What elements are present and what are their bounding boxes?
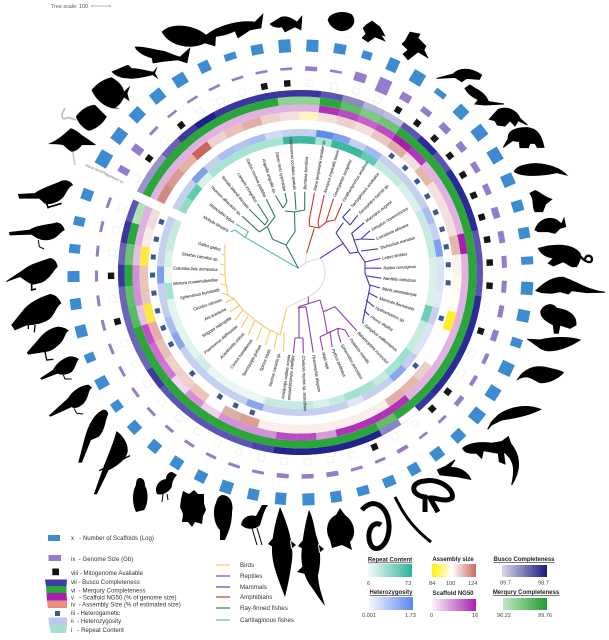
iv: assembly key: iv - Assembly Size (% of estimated size) (71, 602, 181, 608)
species labels: Trichechus manatus (379, 235, 416, 251)
species labels: Sphenodon punctatus (340, 343, 364, 380)
species labels: Seriola lalandi dorsalis (221, 175, 250, 210)
icon: armadillo (489, 108, 527, 126)
root connections (287, 253, 325, 308)
icon: lyrebird fan (180, 490, 206, 527)
icon: rat (535, 218, 566, 233)
species labels: Marmota flaviventris (379, 296, 415, 312)
icon: wading bird (156, 472, 177, 502)
icon: capybara (541, 305, 576, 333)
icon: clouded leopard (538, 245, 592, 267)
v: scaffold key: v - Scaffold NG50 (% of genome size) (71, 594, 177, 602)
species labels: Geotrypetes seraphini (332, 159, 353, 198)
color scale: busco completeness: 98.7 (538, 580, 549, 586)
legend: clades: Birds (240, 562, 254, 569)
mammal and reptile silhouettes, right side (437, 69, 605, 485)
icon: thin snake (395, 497, 431, 542)
color scale: repeat content (367, 558, 412, 587)
icon: lizard (463, 437, 519, 485)
species labels: Bombina bombina (302, 156, 309, 190)
color scale: repeat content: 6 (367, 581, 370, 587)
icon: parrot (79, 410, 108, 462)
species labels: Amblyraja radiata ornata (280, 354, 291, 400)
mammals clade (320, 209, 381, 324)
x: scaffolds key: x - Number of Scaffolds (Log) (71, 535, 154, 542)
ring i: repeat content (164, 136, 437, 409)
species labels: Python bivittatus (331, 348, 347, 377)
icon: elephant (503, 128, 544, 148)
ring iv: assembly size (139, 111, 462, 434)
species labels: Lampris incognitus (236, 172, 259, 203)
viii: mitogenome key: viii - Mitogenome Available (71, 570, 144, 577)
species labels: Acanthisitta chloris (218, 331, 246, 361)
ring x: number of scaffolds (67, 39, 533, 506)
ring iii: heterogametic markers (150, 152, 451, 416)
species labels: Podarcis muralis (349, 337, 371, 364)
species labels: Serinus canaria sp. (267, 352, 281, 387)
species labels: Tachyglossus aculeatus (350, 171, 380, 209)
color scale: heterozygosity: 0.001 (362, 613, 376, 619)
species labels: Corvus hawaiiensis (229, 338, 254, 370)
birds clade (220, 245, 287, 352)
color scale: merqury completeness (493, 590, 560, 619)
amphibians clade (307, 193, 342, 253)
color scale: assembly size: 124 (468, 581, 477, 587)
color scale: merqury completeness: 99.76 (538, 613, 552, 619)
icon: pangolin (536, 277, 605, 294)
color scale: assembly size: Assembly size (432, 557, 474, 563)
color scale: scaffold NG50: Scaffold NG50 (432, 591, 474, 597)
color scale: repeat content: Repeat Content (368, 558, 412, 564)
icon: looped snake (362, 504, 389, 549)
vi: mercury key: vi - Merqury Completeness (71, 588, 146, 594)
legend: clades: Ray-finned fishes (240, 605, 288, 612)
icon: bird 7 (49, 385, 92, 416)
icon: seal (518, 367, 563, 383)
icon: moonfish (92, 77, 130, 108)
species labels: Rana temporaria ranidae sp. (312, 139, 326, 191)
icon: deep-bodied fish (162, 26, 216, 46)
icon: rodent (437, 69, 482, 82)
species labels: Macropus eugenii (364, 199, 393, 223)
species labels: Psarisomus dalhousiae (203, 323, 239, 355)
legend: rings (45, 535, 181, 634)
species labels: Taeniopygia guttata (241, 343, 263, 377)
icon: tuatara (437, 460, 471, 479)
vii: busco key: vii - Busco Completeness (71, 579, 140, 586)
icon: dolphin-shaped seal (527, 337, 580, 351)
cartilaginous fishes clade (230, 224, 298, 268)
icon: hare (530, 191, 552, 212)
species labels: Ara ararauna (202, 306, 228, 322)
icon: bird 2 (9, 223, 64, 249)
iii: heterogametic key: iii - Heterogametic (71, 610, 120, 617)
phylogenetic tree (220, 192, 381, 354)
ring vii: Busco completeness (118, 90, 482, 455)
species labels: Hydrochoerus sp. (375, 305, 406, 323)
color scale: busco completeness: 89.7 (500, 580, 511, 586)
species labels: Phoca vitulina (370, 314, 394, 332)
species labels: Sarcophilus harrisii sp. (357, 183, 390, 216)
tiny outer labels (85, 163, 125, 185)
species labels: Rattus norvegicus (383, 264, 416, 271)
icon: shark (205, 14, 263, 38)
color scale: assembly size (429, 557, 477, 587)
color scale: assembly size: 84 (429, 581, 435, 587)
species labels: Ornithorhynchus anatinus (341, 160, 369, 203)
icon: bird 6 (41, 357, 78, 379)
species labels: Rhincodon typus (208, 202, 236, 224)
ii: heterozygosity key: ii - Heterozygosity (71, 618, 122, 625)
species labels: Dasypus novemcinctus (370, 206, 409, 232)
tree scale: Tree scale: 100 (51, 4, 88, 10)
i: repeat key: i - Repeat Content (71, 627, 124, 634)
icon: whale (488, 407, 541, 429)
reptile and bird silhouettes, bottom (133, 472, 452, 606)
species labels: Strigops habroptila (201, 315, 233, 338)
ring ix: genome size (95, 66, 507, 479)
species labels: Alligator mississippiensis (287, 354, 296, 401)
species labels: Thunnus albacares sp. (209, 184, 243, 217)
species labels: Gallus gallus (198, 241, 221, 252)
species labels: Columba livia domestica (173, 265, 218, 272)
fish and frog silhouettes, top (48, 12, 428, 165)
color scale: busco completeness: Busco Completeness (493, 557, 555, 563)
color scale: assembly size: 100 (446, 581, 455, 587)
species labels: Naja naja (321, 352, 331, 370)
ring v: scaffold NG50 (132, 105, 468, 441)
icon: bird 4 (12, 294, 61, 332)
circular data rings (67, 39, 533, 506)
color scale: busco completeness (493, 557, 555, 586)
color scale: heterozygosity: 1.73 (405, 613, 416, 619)
icon: ostrich (241, 505, 268, 545)
icon: turtle (327, 508, 354, 550)
tiny outer labels: Manta birostris (85, 163, 107, 175)
icon: frog (362, 21, 385, 42)
icon: manatee (514, 164, 567, 175)
icon: coiled snake (414, 481, 452, 512)
ring viii: mitogenome available (black) (108, 80, 493, 451)
species labels: Anguilla anguilla sp. (261, 157, 277, 194)
icon: slender fish (135, 47, 190, 63)
ring ii: heterozygosity (157, 130, 444, 413)
tiny outer labels: Myliobatis sp. (105, 172, 125, 185)
species labels: Mobula birostris (202, 214, 230, 233)
icon: penguin (133, 478, 148, 512)
icon: small fish (270, 16, 302, 32)
species labels: Loxodonta africana (375, 222, 410, 241)
legend: clades: Reptiles (240, 573, 262, 580)
icon: stingray (62, 105, 107, 131)
species labels: Chelonia mydas sp. testudines (301, 355, 308, 411)
color scale: scaffold NG50: 16 (472, 613, 478, 619)
color scale: merqury completeness: Merqury Completeness (493, 590, 560, 596)
legend: clades (216, 562, 294, 624)
species labels: Gadus morhua gadidae (245, 157, 268, 199)
icon: round fish (328, 12, 354, 31)
color scale: heterozygosity (362, 590, 416, 619)
species labels: Menura novaehollandiae (173, 277, 219, 286)
species labels: Manis pentadactyla (382, 286, 418, 298)
ring vi: Merqury completeness (124, 96, 473, 445)
icon: tree frog (402, 32, 428, 60)
icon: bird 3 (6, 258, 57, 290)
species labels: Zalophus californianus (363, 322, 398, 352)
icon: alligator (268, 507, 296, 597)
species labels: Lepus timidus (382, 251, 408, 260)
icon: bird 5 (27, 327, 68, 360)
icon: crocodile (297, 510, 325, 606)
color scale: scaffold NG50 (430, 591, 478, 619)
color scale: repeat content: 73 (405, 581, 411, 587)
icon: crested bird (94, 432, 130, 494)
icon: tall ground bird (214, 495, 233, 540)
species labels (173, 137, 418, 411)
species labels: Spheniscus humboldti (180, 287, 220, 300)
bird silhouettes, left side (6, 181, 130, 494)
color scale: merqury completeness: 96.22 (497, 613, 511, 619)
species labels: Thamnophis elegans (311, 354, 322, 392)
icon: wallaby (465, 85, 504, 105)
ix: genome size key: ix - Genome Size (Gb) (71, 556, 133, 563)
ray-finned fishes clade (242, 192, 305, 268)
icon: manta ray (48, 128, 96, 165)
species labels: Lepisosteus oculatus spatula (289, 137, 297, 191)
ring viii: mitogenome absent (pale hollow) (109, 80, 490, 465)
species labels: Neofelis nebulosa (383, 276, 417, 283)
species labels: Xenopus tropicalis laevis (322, 149, 340, 195)
color scale: scaffold NG50: 0 (430, 613, 433, 619)
icon: tuna (112, 65, 158, 79)
tree scale (51, 4, 110, 10)
species labels: Struthio camelus sp. (182, 251, 219, 262)
legend: clades: Cartilaginous fishes (240, 617, 294, 624)
legend: clades: Mammals (240, 584, 267, 591)
legend: clades: Amphibians (240, 594, 272, 601)
species labels: Danio rerio cyprinidae (275, 151, 287, 192)
species labels: Spinus tristis (258, 348, 272, 372)
species labels: Balaenoptera musculus (356, 330, 390, 365)
color scale: heterozygosity: Heterozygosity (369, 590, 413, 596)
species labels: Cuculus canorus (192, 297, 223, 312)
icon: bird 1 (18, 181, 73, 208)
reptiles clade (293, 297, 357, 354)
